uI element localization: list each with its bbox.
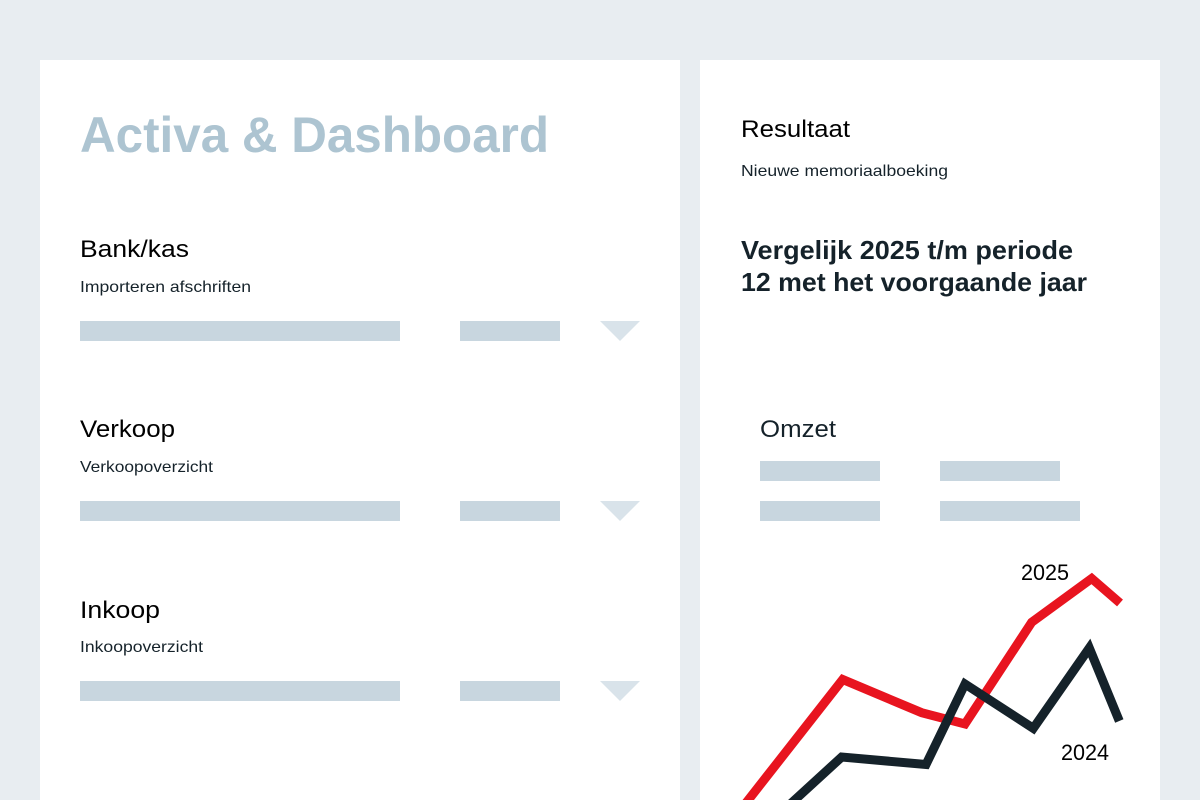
- text: vergelijk: 12 met het voorgaande jaar: [741, 267, 1087, 297]
- heading: omzet: Omzet: [760, 416, 836, 443]
- line chart: [742, 578, 1120, 800]
- heading: resultaat: Resultaat: [741, 116, 850, 143]
- line: 2025: [742, 578, 1120, 800]
- text: vergelijk: Vergelijk 2025 t/m periode: [741, 235, 1073, 265]
- section: bank/kas: Importeren afschriften: [80, 279, 251, 296]
- section: verkoop: [80, 416, 640, 521]
- section: bank/kas: Bank/kas: [80, 236, 189, 263]
- section: bank/kas: [80, 236, 640, 341]
- panel: activa: [40, 60, 680, 800]
- label: 2025: 2025: [1021, 560, 1069, 585]
- section: inkoop: Inkoop: [80, 597, 160, 624]
- title: Activa & Dashboard: [80, 107, 549, 163]
- section: inkoop: Inkoopoverzicht: [80, 639, 204, 656]
- text: vergelijk: [741, 235, 1087, 297]
- label: 2024: 2024: [1061, 740, 1109, 765]
- line: 2024: [786, 648, 1119, 800]
- panel: resultaat: [700, 60, 1160, 800]
- omzet placeholder bars: [760, 461, 1080, 521]
- text: nieuwe memoriaalboeking: Nieuwe memoriaalboeking: [741, 163, 948, 180]
- section: verkoop: Verkoop: [80, 416, 175, 443]
- section: verkoop: Verkoopoverzicht: [80, 459, 214, 476]
- section: inkoop: [80, 597, 640, 701]
